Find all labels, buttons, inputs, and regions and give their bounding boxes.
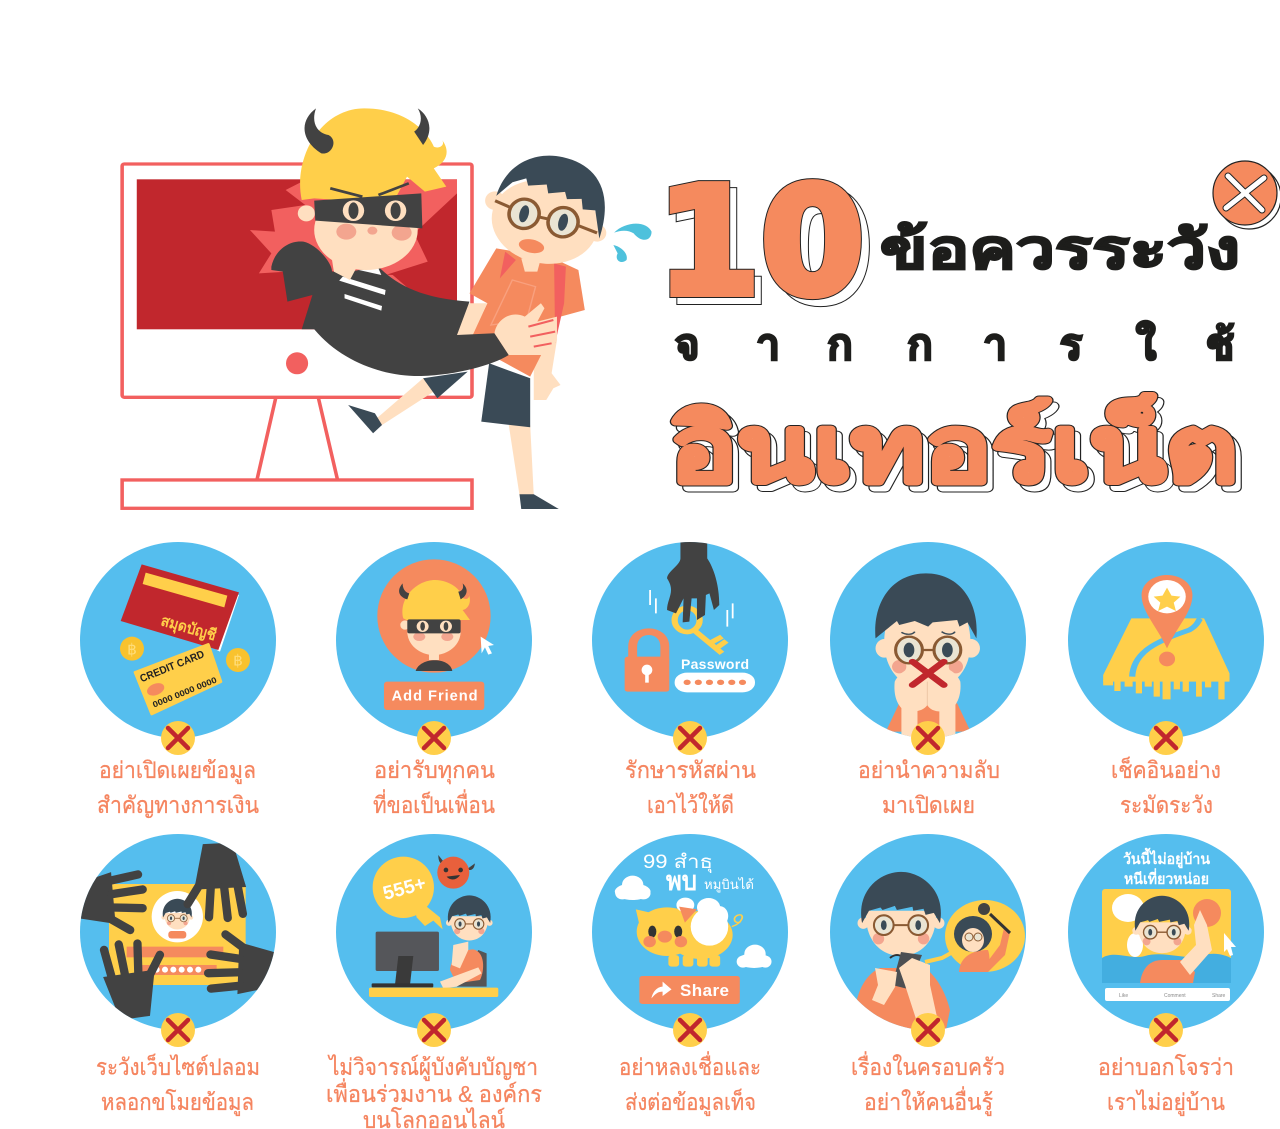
icon: masked thief profile	[377, 559, 494, 710]
icon: x badge	[911, 721, 945, 755]
caption	[97, 757, 259, 818]
panel: item 7 criticizing online	[326, 834, 542, 1129]
title: จากการใช้: า	[756, 321, 780, 368]
icon: vacation photo post: Like	[1119, 993, 1128, 999]
title: number 10: 10	[657, 156, 864, 328]
panel: item 10 away from home	[1068, 834, 1264, 1116]
icon: blue circle	[592, 834, 788, 1030]
caption: ส่งต่อข้อมูลเท็จ	[625, 1087, 756, 1116]
caption: ที่ขอเป็นเพื่อน	[373, 789, 495, 818]
pig post text: พบ	[666, 866, 697, 896]
icon: x badge	[161, 721, 195, 755]
caption: เอาไว้ให้ดี	[647, 792, 734, 818]
password label: Password	[681, 656, 749, 672]
post text: วันนี้ไม่อยู่บ้าน	[1123, 847, 1211, 869]
panel: item 1 financial info	[80, 542, 276, 818]
caption: เช็คอินอย่าง	[1111, 755, 1221, 783]
caption	[851, 1051, 1005, 1116]
caption: เพื่อนร่วมงาน & องค์กร	[326, 1078, 542, 1107]
icon: passbook and credit card	[120, 564, 250, 714]
caption: ไม่วิจารณ์ผู้บังคับบัญชา	[327, 1054, 538, 1081]
caption: มาเปิดเผย	[882, 792, 975, 818]
post text	[1123, 847, 1211, 888]
icon: sweat drops	[613, 224, 652, 262]
icon: boy covering mouth	[875, 573, 980, 737]
caption	[858, 757, 1000, 818]
panel: item 9 family matters	[830, 834, 1026, 1116]
icon: passbook and credit card: 0000 0000 0000	[151, 674, 218, 710]
title: จากการใช้: จ	[675, 321, 699, 368]
icon: blue circle	[592, 542, 788, 738]
icon: map with pin	[1103, 575, 1230, 699]
panel: item 8 fake news	[592, 834, 788, 1116]
icon: passbook and credit card: สมุดบัญชี	[159, 612, 219, 646]
caption	[625, 757, 756, 818]
icon: x badge	[1149, 721, 1183, 755]
icon: blue circle	[336, 834, 532, 1030]
icon: blue circle	[1068, 542, 1264, 738]
title: จากการใช้: ใ	[1136, 320, 1157, 368]
icon: boy with phone gossiping	[855, 872, 1025, 1035]
icon: masked thief profile: Add Friend	[392, 688, 478, 704]
caption: อย่าเปิดเผยข้อมูล	[99, 757, 256, 784]
title: number 10: 10	[664, 163, 872, 335]
title: อินเทอร์เน็ต: อินเทอร์เน็ต	[670, 394, 1238, 501]
icon: hands grabbing login card	[81, 843, 274, 1018]
pig post text	[643, 852, 754, 896]
caption: เราไม่อยู่บ้าน	[1107, 1089, 1225, 1116]
icon: vacation photo post	[1102, 889, 1236, 1001]
icon: x badge	[673, 1013, 707, 1047]
caption	[96, 1052, 260, 1116]
icon: flying pig, clouds and share button	[615, 876, 772, 1004]
caption: หลอกขโมยข้อมูล	[101, 1089, 254, 1116]
icon: blue circle	[830, 834, 1026, 1030]
caption	[1098, 1054, 1234, 1116]
caption	[619, 1051, 761, 1116]
title: จากการใช้: ก	[827, 321, 853, 368]
icon: passbook and credit card: ฿	[127, 640, 137, 658]
icon: boy at computer with speech bubble: 555+	[381, 873, 428, 905]
title: จากการใช้: ร	[1060, 321, 1083, 368]
title: number 10: 10	[657, 156, 864, 328]
icon: boy at computer with speech bubble	[369, 855, 498, 997]
icon: burst through the screen	[250, 179, 457, 293]
icon: hand stealing key, lock	[625, 535, 755, 692]
icon: x badge	[161, 1013, 195, 1047]
title: จากการใช้: า	[983, 321, 1007, 368]
panel: item 4 secrets	[830, 542, 1026, 818]
icon: x badge	[417, 1013, 451, 1047]
post text: หนีเที่ยวหน่อย	[1124, 868, 1209, 888]
caption	[373, 757, 495, 818]
caption: อย่าบอกโจรว่า	[1098, 1054, 1234, 1080]
icon: passbook and credit card: ฿	[233, 652, 243, 670]
icon: blue circle	[336, 542, 532, 738]
caption: ระมัดระวัง	[1120, 792, 1213, 818]
caption: รักษารหัสผ่าน	[625, 757, 756, 783]
panel: item 5 check-in	[1068, 542, 1264, 818]
icon: passbook and credit card: CREDIT CARD	[138, 648, 206, 685]
share label: Share	[680, 981, 729, 1000]
title: อินเทอร์เน็ต: อินเทอร์เน็ต	[676, 400, 1244, 507]
pig post text: 99 สำธุ	[643, 852, 713, 874]
title block	[657, 156, 1280, 507]
icon: vacation photo post: Share	[1212, 993, 1226, 999]
title: number 10: 10	[664, 163, 872, 335]
title: ข้อควรระวัง: ข้อควรระวัง	[880, 220, 1240, 280]
panel: item 6 fake websites	[80, 834, 276, 1116]
caption: อย่ารับทุกคน	[374, 757, 495, 784]
icon: orange x circle	[1213, 161, 1280, 229]
illustration: thief reaching out of a computer monitor to grab a boy	[122, 108, 652, 509]
title: จากการใช้: ช้	[1206, 321, 1234, 368]
thief	[271, 108, 557, 376]
icon: x badge	[673, 721, 707, 755]
title: อินเทอร์เน็ต: อินเทอร์เน็ต	[676, 400, 1244, 507]
icon: blue circle	[80, 542, 276, 738]
caption: อย่าหลงเชื่อและ	[619, 1051, 761, 1080]
icon: x badge	[1149, 1013, 1183, 1047]
icon: blue circle	[1068, 834, 1264, 1030]
panel: item 2 add friend	[336, 542, 532, 818]
icon: blue circle	[80, 834, 276, 1030]
caption	[326, 1054, 542, 1129]
title: อินเทอร์เน็ต: อินเทอร์เน็ต	[670, 394, 1238, 501]
icon: blue circle	[830, 542, 1026, 738]
caption	[1111, 755, 1221, 818]
icon: x badge	[417, 721, 451, 755]
caption: สำคัญทางการเงิน	[97, 792, 259, 818]
panel: item 3 password	[592, 535, 788, 818]
caption: เรื่องในครอบครัว	[851, 1051, 1005, 1080]
title: จากการใช้: ก	[907, 321, 933, 368]
victim boy	[348, 143, 622, 509]
icon: vacation photo post: Comment	[1164, 993, 1186, 999]
caption: อย่านำความลับ	[858, 757, 1000, 783]
pig post text: หมูบินได้	[704, 877, 754, 893]
icon: computer monitor	[122, 164, 472, 508]
icon: x badge	[911, 1013, 945, 1047]
caption: อย่าให้คนอื่นรู้	[864, 1086, 993, 1116]
caption: ระวังเว็บไซต์ปลอม	[96, 1052, 260, 1080]
